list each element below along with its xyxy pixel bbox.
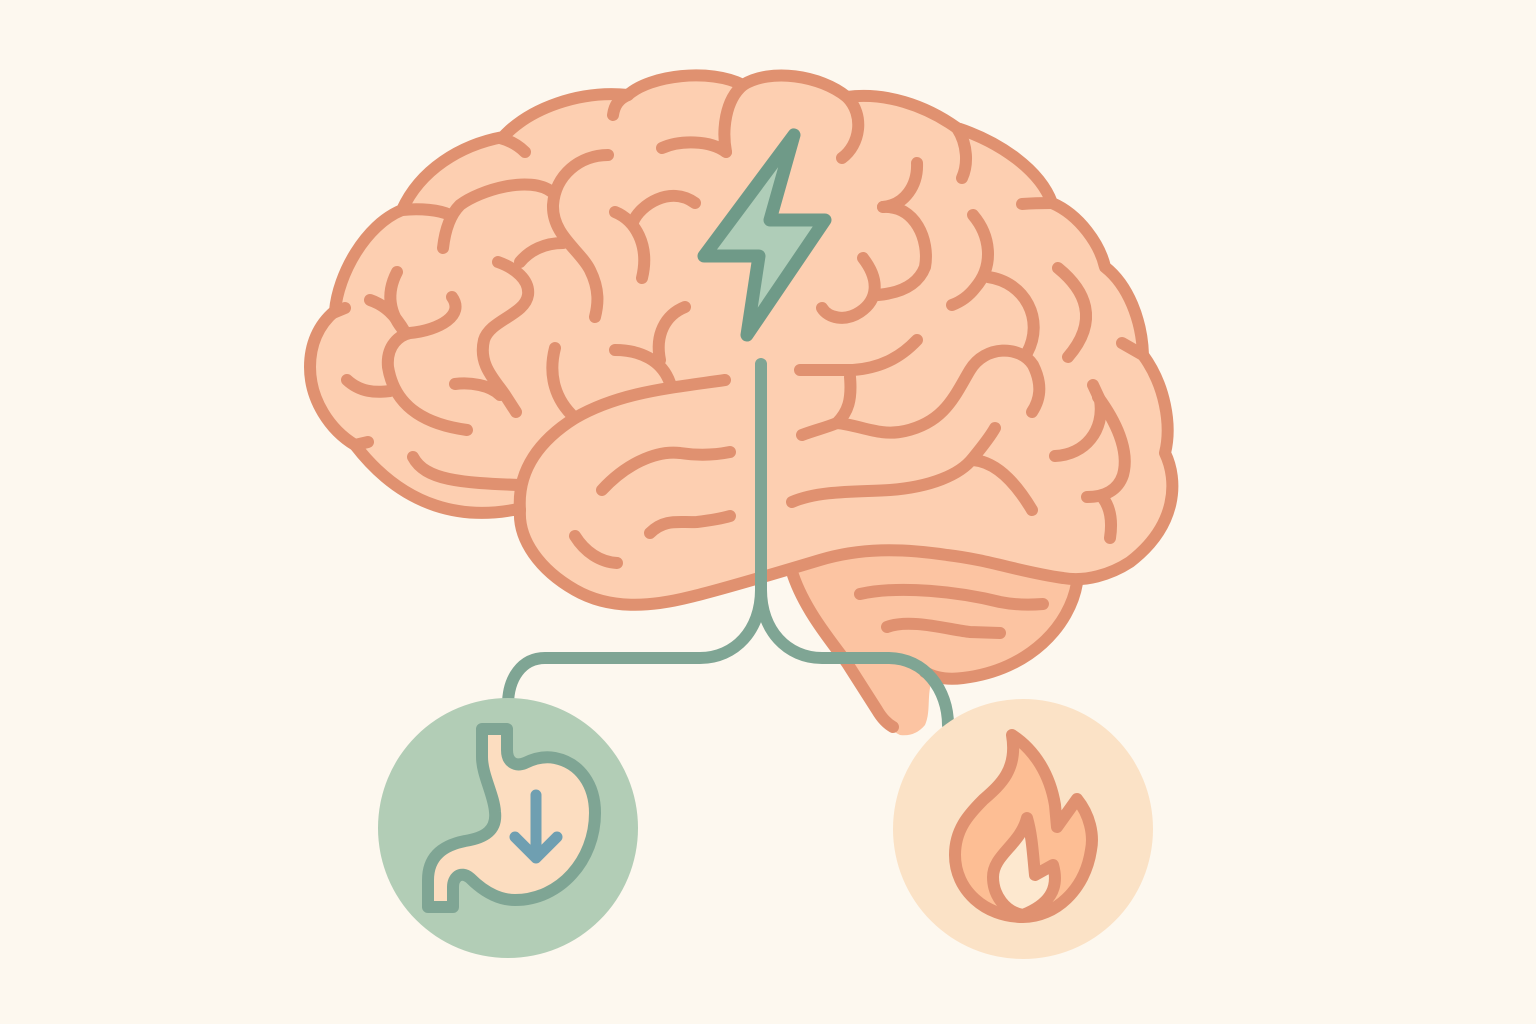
panel: stomach circle [378, 698, 638, 958]
icon: lightning bolt [704, 135, 825, 335]
icon: flame [955, 735, 1092, 917]
brain folds [333, 85, 1143, 563]
panel: flame circle [893, 699, 1153, 959]
icon: inner flame [993, 818, 1055, 915]
brain cerebrum [310, 75, 1172, 605]
cerebellum and brainstem [790, 550, 1080, 735]
brain outline [310, 75, 1172, 605]
icon: stomach [428, 729, 595, 907]
connector lines from brain to icons [508, 364, 948, 725]
icon: down arrow [515, 795, 557, 858]
